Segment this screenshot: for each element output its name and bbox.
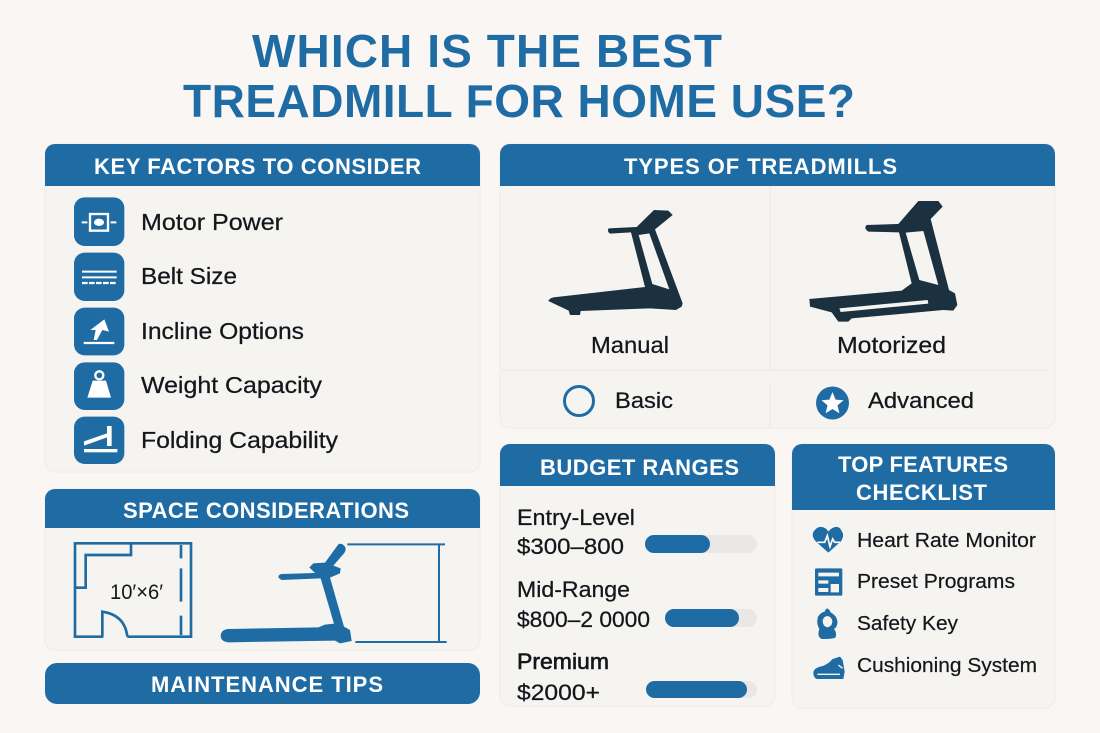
label: basic: Basic (615, 388, 673, 413)
factor list (74, 197, 124, 464)
label: manual: Manual (591, 332, 669, 358)
room size label: 10′×6′ (110, 581, 163, 604)
heading: budget ranges: BUDGET RANGES (540, 455, 739, 480)
title: TREADMILL FOR HOME USE? (183, 75, 855, 127)
heading: space considerations (45, 489, 480, 528)
icon: heart rate (813, 527, 843, 553)
budget: premium (517, 649, 757, 705)
icon: motorized treadmill (809, 201, 957, 322)
icon: manual treadmill (548, 210, 683, 315)
factor labels: Motor Power (141, 209, 283, 235)
factor labels: Belt Size (141, 263, 237, 289)
icon: belt size (74, 253, 124, 301)
title (183, 25, 855, 127)
icon: safety key (817, 608, 837, 639)
budget: premium: $2000+ (517, 680, 600, 705)
budget: mid-range: $800–2 0000 (517, 607, 650, 632)
factor labels (141, 209, 339, 453)
panel: maintenance tips: MAINTENANCE TIPS (151, 672, 383, 697)
heading: top features: CHECKLIST (856, 480, 988, 505)
icon: folding capability (74, 417, 124, 464)
panel: maintenance tips (45, 663, 480, 704)
label: heart rate monitor: Heart Rate Monitor (857, 529, 1036, 552)
heading: budget ranges (500, 444, 775, 486)
panel: top features checklist (792, 444, 1055, 708)
heading: types: TYPES OF TREADMILLS (624, 154, 897, 179)
label: advanced: Advanced (868, 388, 974, 413)
icon: weight capacity (74, 362, 124, 410)
icon: motor power (74, 197, 124, 246)
treadmill clearance diagram (221, 544, 447, 643)
panel: key factors to consider (45, 144, 480, 472)
label: cushioning system: Cushioning System (857, 654, 1037, 677)
budget: entry-level: $300–800 (517, 534, 624, 559)
icon: advanced star (816, 386, 849, 420)
label: motorized: Motorized (837, 332, 946, 358)
icon: basic circle (564, 386, 594, 416)
icon: cushioning shoe (813, 657, 845, 679)
budget: mid-range: Mid-Range (517, 577, 630, 602)
heading: top features: TOP FEATURES (838, 452, 1008, 477)
icon: incline options (74, 308, 124, 355)
label: safety key: Safety Key (857, 612, 959, 635)
title: WHICH IS THE BEST (252, 25, 722, 77)
panel: types of treadmills (500, 144, 1055, 428)
label: preset programs: Preset Programs (857, 570, 1015, 593)
heading: key factors (45, 144, 480, 186)
budget: premium: Premium (517, 649, 609, 674)
panel: budget ranges (500, 444, 775, 706)
heading: types (500, 144, 1055, 186)
budget: entry-level (517, 505, 757, 559)
factor labels: Weight Capacity (141, 372, 323, 398)
panel: space considerations (45, 489, 480, 650)
budget: entry-level: Entry-Level (517, 505, 635, 530)
factor labels: Folding Capability (141, 427, 339, 453)
budget: mid-range (517, 577, 757, 632)
icon: preset programs (815, 568, 842, 596)
heading: top features (792, 444, 1055, 510)
factor labels: Incline Options (141, 318, 304, 344)
heading: space considerations: SPACE CONSIDERATIONS (123, 498, 409, 523)
heading: key factors: KEY FACTORS TO CONSIDER (94, 154, 421, 179)
room floor plan (75, 543, 191, 637)
